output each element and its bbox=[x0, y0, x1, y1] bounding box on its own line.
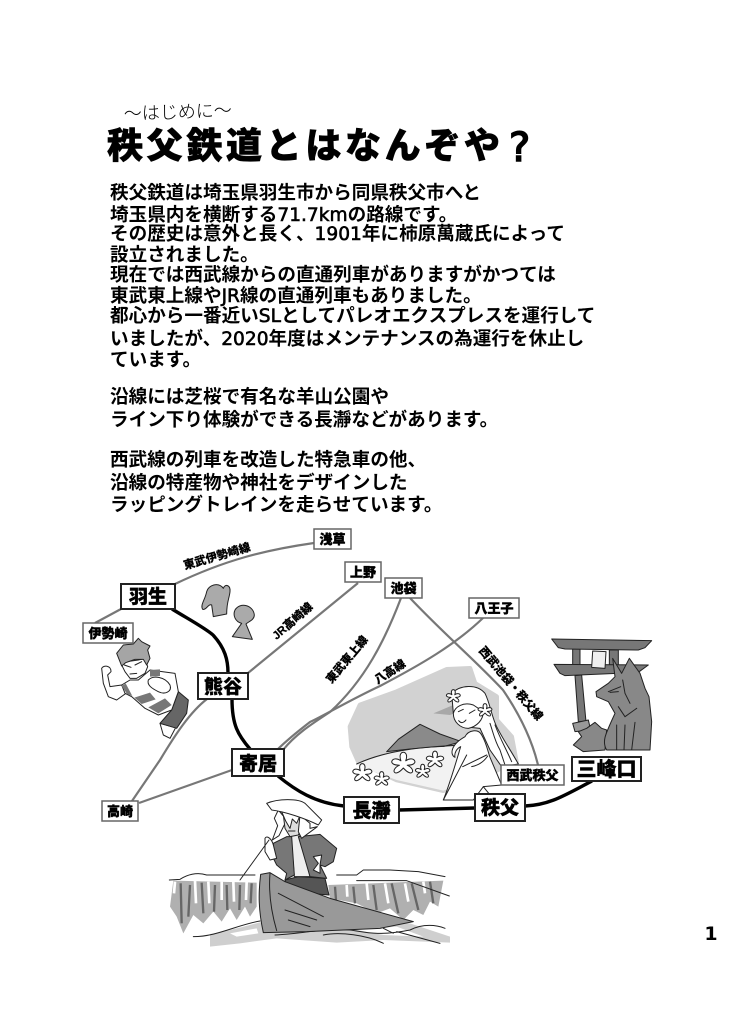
station: 秩父 bbox=[475, 794, 525, 821]
title: ? bbox=[509, 125, 530, 171]
illustration: river and reeds bbox=[169, 870, 450, 947]
illustration: boat bbox=[259, 873, 413, 933]
line labels: 八高線 bbox=[372, 656, 409, 687]
body text: 設立されました。 bbox=[110, 245, 259, 266]
station: 寄居 bbox=[232, 749, 284, 776]
station: 羽生 bbox=[121, 584, 175, 609]
network lines bbox=[95, 543, 592, 810]
station: 秩父: 秩父 bbox=[481, 797, 519, 819]
station: 伊勢崎: 伊勢崎 bbox=[88, 626, 128, 641]
station: 長瀞 bbox=[344, 797, 399, 823]
station: 池袋: 池袋 bbox=[390, 581, 417, 596]
body text: 沿線には芝桜で有名な羊山公園や bbox=[110, 386, 389, 408]
line labels: 東武東上線 bbox=[323, 633, 371, 686]
station: 上野: 上野 bbox=[350, 565, 376, 580]
station: 西武秩父 bbox=[501, 765, 564, 785]
station: 池袋 bbox=[385, 578, 422, 598]
station: 熊谷: 熊谷 bbox=[204, 676, 242, 698]
subtitle: 〜はじめに〜 bbox=[123, 100, 232, 124]
body text: 都心から一番近いSLとしてパレオエクスプレスを運行して bbox=[110, 306, 595, 327]
body text: 埼玉県内を横断する71.7kmの路線です。 bbox=[110, 205, 457, 226]
body text: ています。 bbox=[110, 350, 201, 371]
body text bbox=[110, 183, 595, 516]
station: 八王子 bbox=[469, 598, 519, 618]
body text: 沿線の特産物や神社をデザインした bbox=[110, 472, 408, 494]
line labels: 東武伊勢崎線 bbox=[182, 540, 252, 572]
body text: ライン下り体験ができる長瀞などがあります。 bbox=[110, 409, 498, 431]
flowers bbox=[353, 751, 444, 785]
body text: ラッピングトレインを走らせています。 bbox=[110, 494, 442, 516]
icon: rock figures bbox=[202, 585, 254, 639]
illustration: girl bbox=[443, 686, 518, 800]
station: 高崎 bbox=[102, 801, 138, 821]
body text: 西武線の列車を改造した特急車の他、 bbox=[110, 449, 426, 471]
station: 浅草: 浅草 bbox=[319, 532, 346, 547]
illustration: boatman bbox=[240, 800, 337, 895]
body text: その歴史は意外と長く、1901年に柿原萬蔵氏によって bbox=[110, 223, 565, 245]
line labels bbox=[182, 540, 546, 724]
body text: 秩父鉄道は埼玉県羽生市から同県秩父市へと bbox=[110, 183, 481, 204]
station: 羽生: 羽生 bbox=[129, 585, 167, 608]
station: 寄居: 寄居 bbox=[239, 752, 277, 775]
station: 八王子: 八王子 bbox=[474, 601, 514, 616]
station: 高崎: 高崎 bbox=[107, 804, 133, 819]
station: 浅草 bbox=[314, 529, 351, 549]
station: 長瀞: 長瀞 bbox=[352, 800, 391, 822]
illustration: wolf bbox=[573, 658, 652, 752]
body text: 東武東上線やJR線の直通列車もありました。 bbox=[110, 286, 482, 307]
station: 三峰口: 三峰口 bbox=[576, 758, 636, 781]
illustration: torii bbox=[552, 639, 652, 732]
body text: いましたが、2020年度はメンテナンスの為運行を休止し bbox=[110, 328, 584, 350]
station: 熊谷 bbox=[198, 673, 248, 699]
station: 西武秩父: 西武秩父 bbox=[506, 768, 559, 783]
station: 上野 bbox=[345, 562, 381, 582]
station: 伊勢崎 bbox=[83, 623, 133, 643]
illustration: rugby player bbox=[102, 638, 188, 738]
line labels: JR高崎線 bbox=[269, 599, 316, 642]
page number: 1 bbox=[704, 923, 718, 945]
line labels: 西武池袋・秩父線 bbox=[476, 644, 546, 724]
scene: shibazakura hill and mountain bbox=[350, 668, 517, 791]
body text: 現在では西武線からの直通列車がありますがかつては bbox=[110, 264, 556, 286]
title: 秩父鉄道とはなんぞや bbox=[107, 125, 500, 166]
